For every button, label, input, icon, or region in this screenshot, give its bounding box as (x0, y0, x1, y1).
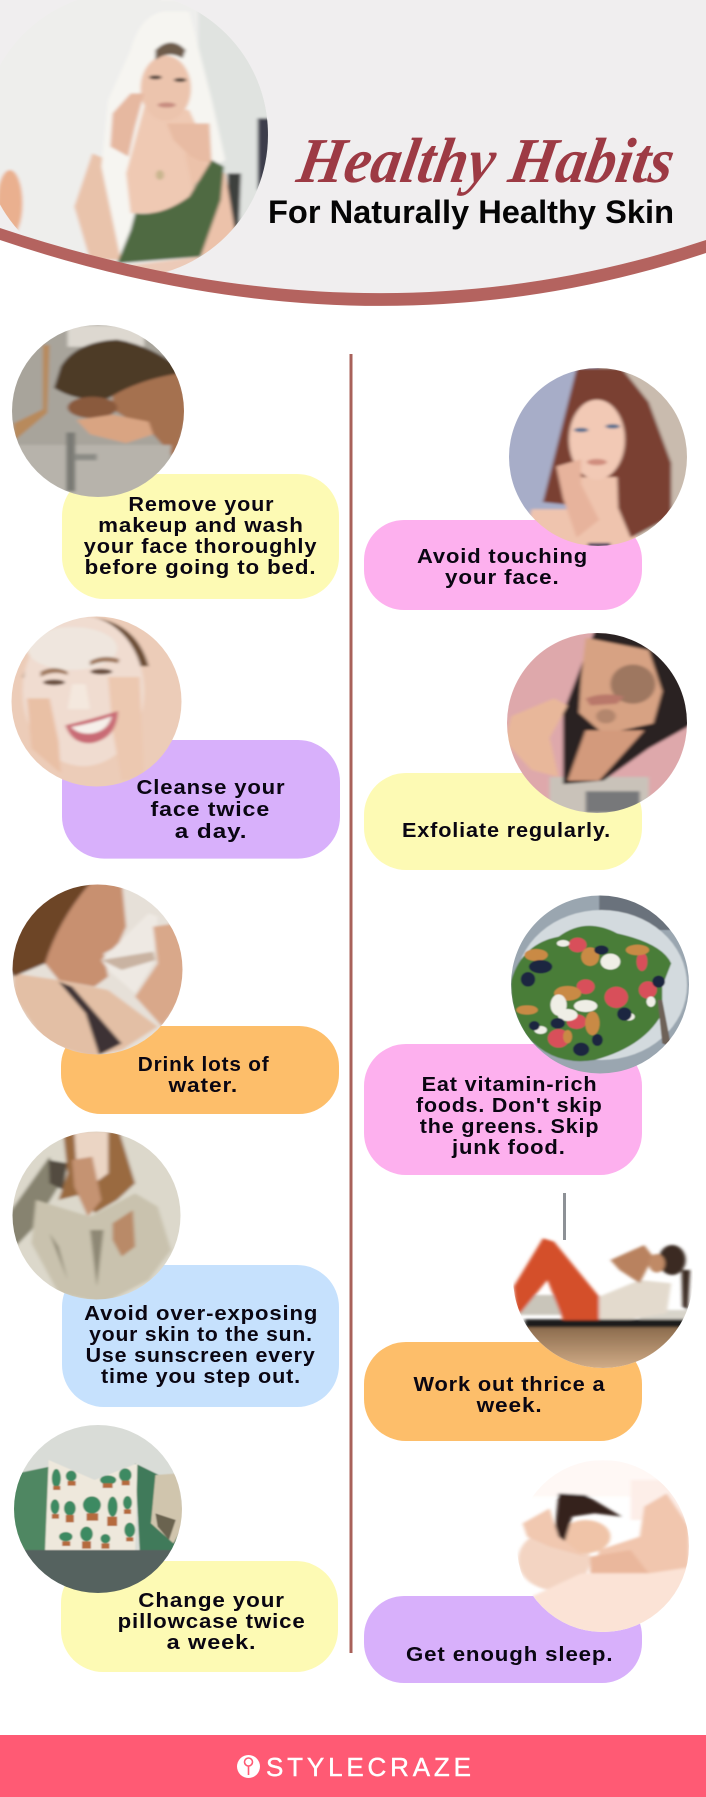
text (416, 1073, 603, 1159)
text: your face. (445, 566, 560, 589)
text (136, 776, 286, 843)
footer bar (0, 1735, 706, 1797)
text: makeup and wash (98, 514, 304, 537)
pill (62, 474, 339, 599)
text: Cleanse your (136, 776, 286, 799)
pill (364, 520, 642, 610)
photo: washing face (12, 325, 184, 497)
card: sun (5, 1127, 339, 1407)
text: foods. Don't skip (416, 1094, 603, 1117)
center divider (350, 354, 352, 1653)
photo: woman with brown hair (509, 368, 687, 546)
card: pillowcase (9, 1422, 338, 1672)
card: drink water (5, 880, 339, 1114)
text: pillowcase twice (118, 1610, 306, 1633)
photo: salad bowl (511, 896, 689, 1074)
text (138, 1053, 270, 1097)
pill (364, 1044, 642, 1175)
icon: logo (237, 1755, 260, 1778)
pill (364, 773, 642, 870)
text: a day. (175, 820, 248, 843)
text: Remove your (128, 493, 274, 516)
photo: sit-ups (510, 1193, 703, 1373)
white area below curve (0, 240, 706, 306)
pill (61, 1026, 339, 1114)
card: sleep (364, 1460, 694, 1683)
title: Healthy Habits (292, 125, 680, 196)
text (118, 1589, 306, 1654)
text: the greens. Skip (420, 1115, 599, 1138)
pill (364, 1342, 642, 1441)
text: junk food. (451, 1136, 566, 1159)
brand name: STYLECRAZE (266, 1752, 471, 1782)
text: Exfoliate regularly. (402, 819, 611, 842)
text: your face thoroughly (84, 535, 317, 558)
header background (0, 0, 706, 293)
photo: woman in robe (12, 1132, 180, 1300)
text (84, 1302, 318, 1388)
text: Avoid touching (417, 545, 588, 568)
card: vitamin foods (364, 890, 698, 1175)
text: Use sunscreen every (86, 1344, 316, 1367)
text: a week. (167, 1631, 256, 1654)
photo: exfoliating (507, 633, 687, 813)
text: Get enough sleep. (406, 1643, 613, 1666)
photo: cactus pillow (14, 1425, 182, 1593)
text: time you step out. (101, 1365, 301, 1388)
text: week. (475, 1394, 543, 1417)
text: your skin to the sun. (89, 1323, 313, 1346)
text: face twice (150, 798, 270, 821)
text (84, 493, 317, 579)
header (0, 0, 706, 306)
pill (364, 1596, 642, 1683)
text: before going to bed. (85, 556, 316, 579)
card: exfoliate (364, 627, 698, 870)
text (414, 1373, 606, 1417)
curved band (0, 228, 706, 306)
text: Change your (138, 1589, 285, 1612)
card: work out (364, 1193, 703, 1441)
text: water. (167, 1074, 238, 1097)
photo: drinking water (12, 884, 182, 1054)
card: cleanse (5, 613, 340, 859)
text: Avoid over-exposing (84, 1302, 318, 1325)
card: avoid touching (364, 363, 698, 610)
text: Drink lots of (138, 1053, 270, 1076)
pill (62, 1265, 339, 1407)
photo: sleeping woman (514, 1460, 694, 1640)
subtitle: For Naturally Healthy Skin (268, 194, 674, 230)
hero photo: woman with towel (0, 12, 268, 272)
text: Work out thrice a (414, 1373, 606, 1396)
photo: face mask (12, 616, 182, 786)
pill (61, 1561, 338, 1672)
text: Eat vitamin-rich (422, 1073, 598, 1096)
text (417, 545, 588, 589)
card: remove makeup (5, 320, 339, 599)
pill (62, 740, 340, 859)
